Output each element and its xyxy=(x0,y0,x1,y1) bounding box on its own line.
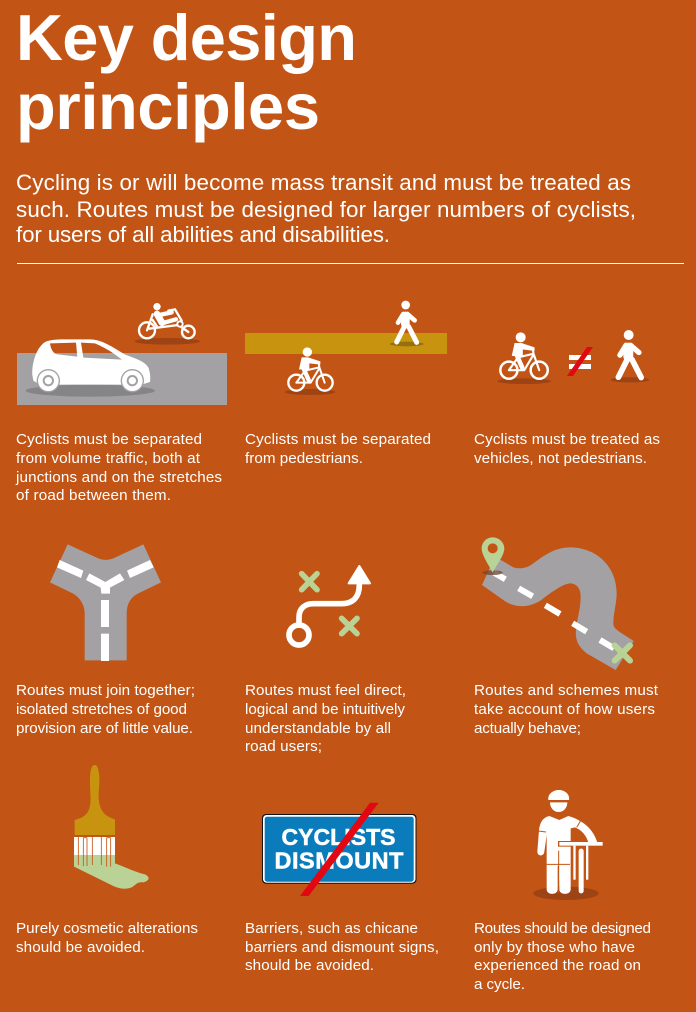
panel: designers experience xyxy=(474,790,651,993)
title: principles xyxy=(16,70,320,143)
panel: routes join xyxy=(16,544,195,737)
caption xyxy=(15,431,222,504)
caption: isolated stretches of good xyxy=(16,701,187,718)
icon: cyclist with helmet and bike xyxy=(533,790,603,900)
panel: cosmetic alterations xyxy=(16,765,198,956)
caption: should be avoided. xyxy=(245,957,374,974)
icon: route arrow xyxy=(289,566,370,645)
icon: pedestrian xyxy=(390,301,424,346)
caption: Cyclists must be separated xyxy=(16,431,202,448)
caption: a cycle. xyxy=(474,976,525,993)
caption xyxy=(474,431,660,467)
caption: barriers and dismount signs, xyxy=(245,939,439,956)
icon: junction road xyxy=(50,544,161,661)
intro text: Cycling is or will become mass transit and must be treated as xyxy=(16,170,631,195)
icon: cyclist xyxy=(285,347,335,395)
panel: separate from pedestrians xyxy=(245,301,447,467)
panel: separate from traffic xyxy=(15,303,227,504)
icon: paint brush xyxy=(74,765,149,889)
caption: Routes must join together; xyxy=(16,682,195,699)
caption: experienced the road on xyxy=(474,957,641,974)
icon: recumbent cycle xyxy=(135,303,200,345)
caption: vehicles, not pedestrians. xyxy=(474,450,647,467)
intro text: for users of all abilities and disabilities. xyxy=(16,222,390,247)
handlebar outline on body xyxy=(558,841,571,847)
caption: Cyclists must be treated as xyxy=(474,431,660,448)
title: Key design xyxy=(16,1,357,74)
caption: from pedestrians. xyxy=(245,450,363,467)
caption: Routes must feel direct, xyxy=(245,682,406,699)
caption xyxy=(16,682,195,737)
caption: should be avoided. xyxy=(16,939,145,956)
icon: car xyxy=(26,339,155,397)
caption: Routes and schemes must xyxy=(474,682,659,699)
caption xyxy=(245,920,439,974)
caption: logical and be intuitively xyxy=(245,701,405,718)
caption: Barriers, such as chicane xyxy=(245,920,418,937)
icon: crossed-out dismount sign: CYCLISTS xyxy=(282,824,396,850)
icon: pedestrian xyxy=(610,330,649,382)
panel: vehicles not pedestrians xyxy=(474,330,660,467)
caption xyxy=(245,682,406,755)
icon: footway band xyxy=(245,333,447,354)
caption: Purely cosmetic alterations xyxy=(16,920,198,937)
caption xyxy=(474,682,659,737)
panel: direct routes xyxy=(245,566,406,755)
caption: provision are of little value. xyxy=(16,720,193,737)
icon: not-equal sign xyxy=(567,347,593,376)
caption xyxy=(245,431,431,467)
panel: user behaviour xyxy=(474,537,659,737)
icon: crossed-out dismount sign: DISMOUNT xyxy=(274,848,404,874)
caption: actually behave; xyxy=(474,720,581,737)
icon: winding road with pin xyxy=(482,537,634,670)
intro text: such. Routes must be designed for larger numbers of cyclists, xyxy=(16,197,636,222)
icon: road surface xyxy=(17,353,227,405)
caption: Routes should be designed xyxy=(474,920,651,937)
caption: understandable by all xyxy=(245,720,391,737)
caption: of road between them. xyxy=(16,487,171,504)
caption xyxy=(16,920,198,956)
caption: road users; xyxy=(245,738,322,755)
icon: crossed-out dismount sign xyxy=(262,803,416,896)
title xyxy=(16,1,357,143)
icon: cyclist xyxy=(497,332,551,384)
caption: only by those who have xyxy=(474,939,635,956)
panel: barriers xyxy=(245,803,439,974)
caption: take account of how users xyxy=(474,701,655,718)
caption: from volume traffic, both at xyxy=(16,450,201,467)
intro text xyxy=(16,170,636,247)
caption: Cyclists must be separated xyxy=(245,431,431,448)
caption xyxy=(474,920,651,993)
caption: junctions and on the stretches xyxy=(15,469,222,486)
